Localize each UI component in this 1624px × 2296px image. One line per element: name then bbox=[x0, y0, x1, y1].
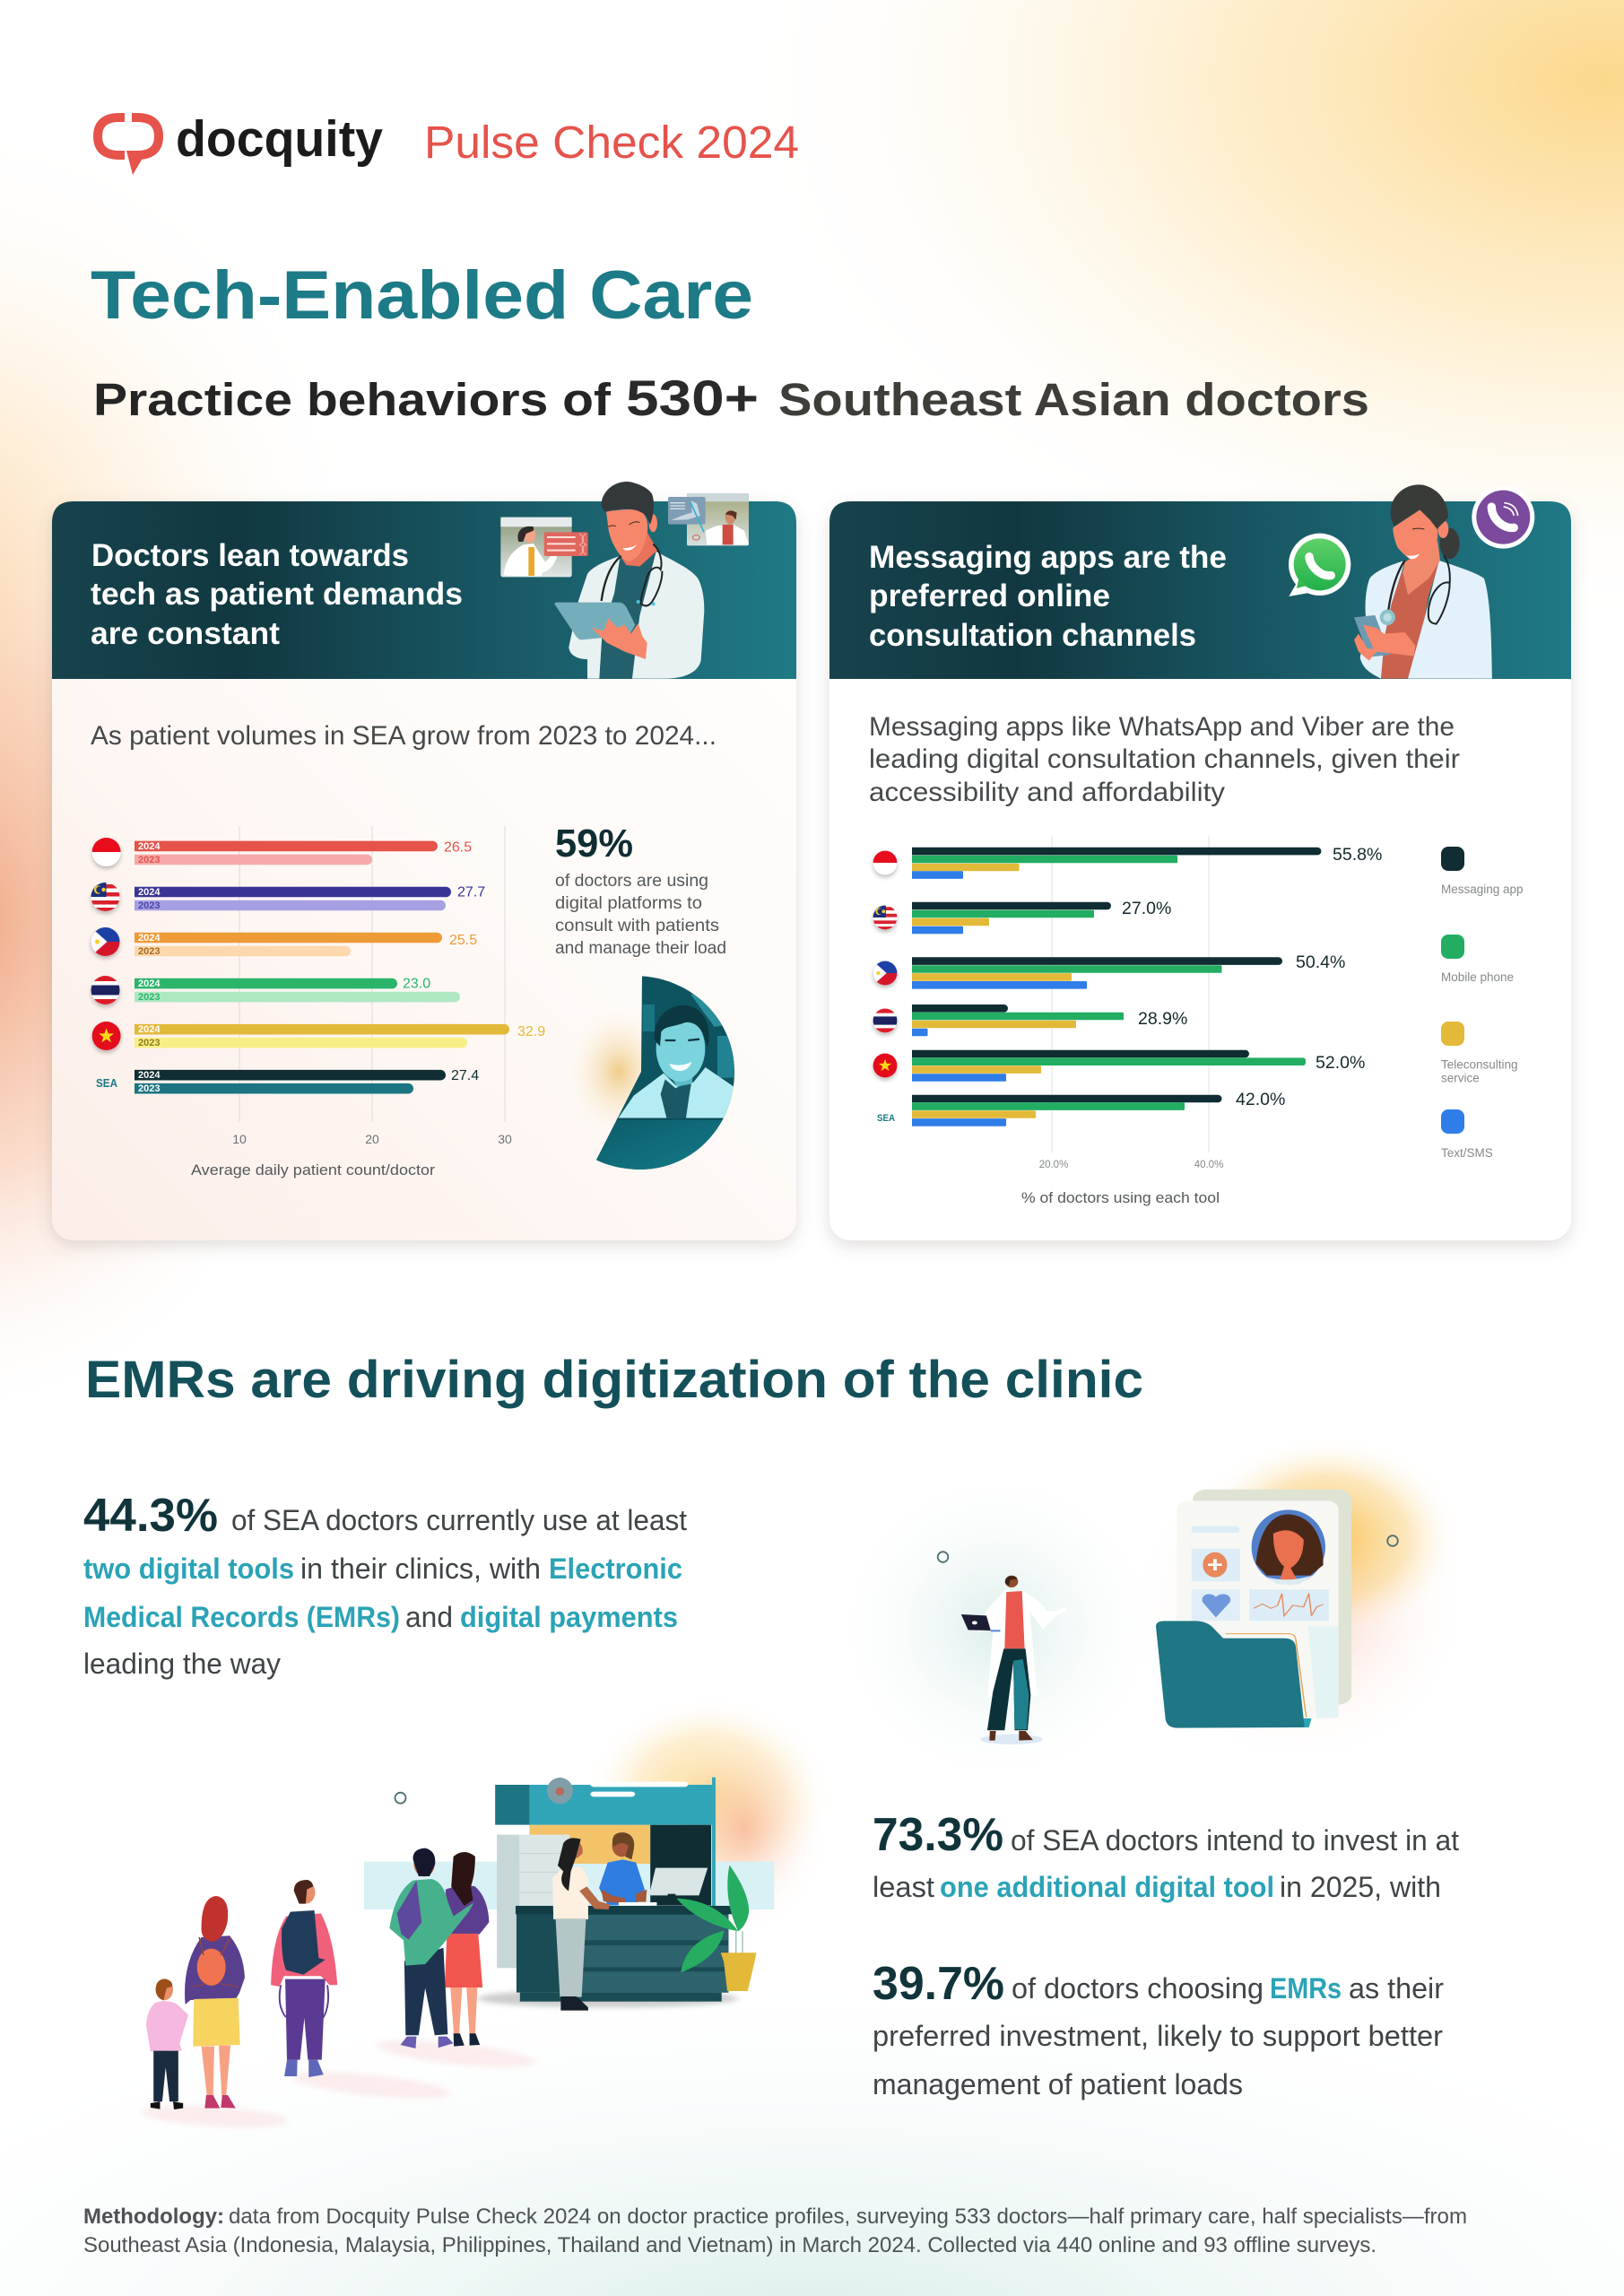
value labels: 52.0% bbox=[1316, 1053, 1365, 1073]
axis caption: % of doctors using each tool bbox=[1021, 1190, 1220, 1206]
value labels: 27.0% bbox=[1122, 899, 1171, 918]
bar chart: daily patient count: 2023 bbox=[138, 1038, 160, 1048]
icon: docquity speech bubble bbox=[98, 117, 159, 175]
year tags: 2024 bbox=[138, 933, 161, 944]
text block: 44.3 percent bbox=[83, 1490, 687, 1680]
stat: 59 percent: consult with patients bbox=[555, 917, 719, 935]
year tags: 2024 bbox=[138, 1024, 161, 1035]
card body bbox=[52, 501, 796, 1240]
decorative circle bbox=[395, 1793, 405, 1804]
figure: patient at counter bbox=[552, 1838, 610, 2011]
value labels: 42.0% bbox=[1236, 1090, 1285, 1109]
year tags: 2024 bbox=[138, 841, 161, 852]
legend: Mobile phone bbox=[1441, 970, 1514, 984]
header text bbox=[869, 540, 1227, 653]
country flags bbox=[873, 851, 897, 1077]
stat: 59 percent: of doctors are using bbox=[555, 872, 708, 891]
methodology note: Southeast Asia (Indonesia, Malaysia, Philippines, Thailand and Vietnam) in March 2024. Collected via 440 online and 93 offline surveys. bbox=[83, 2233, 1376, 2257]
text block: 44.3 percent: leading the way bbox=[83, 1648, 281, 1680]
text block: 39.7 percent: preferred investment, likely to support better bbox=[873, 2020, 1443, 2052]
axis ticks: 10 bbox=[232, 1132, 247, 1146]
axis ticks bbox=[1039, 1160, 1223, 1170]
gridlines bbox=[239, 826, 505, 1122]
text block: 44.3 percent: in their clinics, with bbox=[300, 1552, 541, 1585]
bars bbox=[126, 841, 509, 1094]
title: Tech-Enabled Care bbox=[91, 257, 753, 334]
heading: EMRs: EMRs are driving digitization of the clinic bbox=[85, 1351, 1143, 1409]
photo: smiling doctor in pac-man shape bbox=[579, 976, 734, 1170]
icon: whatsapp bbox=[1289, 534, 1350, 596]
intro paragraph: accessibility and affordability bbox=[869, 778, 1225, 807]
text block: 39.7 percent bbox=[873, 1958, 1444, 2100]
booth glow bbox=[583, 1695, 834, 1901]
year tags bbox=[138, 841, 161, 1094]
figure: receptionist bbox=[599, 1832, 708, 1906]
year tags: 2024 bbox=[138, 1070, 161, 1081]
illustration: doctor and patient record bbox=[827, 1435, 1471, 1794]
SEA label: SEA bbox=[96, 1076, 118, 1090]
value labels: 27.4 bbox=[451, 1068, 479, 1083]
gridlines bbox=[1052, 836, 1209, 1152]
country flags bbox=[91, 838, 121, 1050]
bar chart: daily patient count: 2023 bbox=[138, 900, 160, 911]
year tags: 2023 bbox=[138, 1083, 160, 1094]
illustration: female doctor with phone bbox=[1354, 484, 1492, 679]
intro paragraph: leading digital consultation channels, given their bbox=[869, 744, 1460, 774]
header text: consultation channels bbox=[869, 618, 1196, 653]
value labels: 25.5 bbox=[449, 933, 477, 948]
record sheets and folder bbox=[1156, 1490, 1351, 1728]
text block: 39.7 percent: management of patient loads bbox=[873, 2068, 1243, 2100]
value labels bbox=[1122, 845, 1382, 1109]
year tags: 2024 bbox=[138, 887, 161, 898]
wordmark: docquity bbox=[176, 110, 383, 168]
panel: messaging apps bbox=[829, 484, 1571, 1240]
subtitle: Practice behaviors of bbox=[93, 374, 612, 425]
stat: 59 percent bbox=[555, 822, 726, 958]
text block: 44.3 percent: and bbox=[405, 1601, 453, 1633]
panel: doctors lean towards tech bbox=[52, 482, 796, 1240]
text block: 44.3 percent: Medical Records (EMRs) bbox=[83, 1601, 400, 1633]
text block: 39.7 percent: 39.7% bbox=[873, 1958, 1004, 2010]
value labels: 27.7 bbox=[457, 884, 485, 900]
card header bbox=[829, 501, 1571, 679]
axis ticks: 30 bbox=[498, 1132, 512, 1146]
axis ticks bbox=[232, 1132, 512, 1146]
stat: 59 percent: and manage their load bbox=[555, 939, 726, 958]
header text: tech as patient demands bbox=[91, 577, 463, 612]
text block: 44.3 percent: Electronic bbox=[549, 1552, 682, 1585]
text block: 73.3 percent: 73.3% bbox=[873, 1809, 1003, 1861]
soft glows bbox=[827, 1435, 1471, 1794]
illustration: telehealth panels bbox=[500, 493, 749, 577]
legend: Text/SMS bbox=[1441, 1146, 1493, 1160]
intro sentence: As patient volumes in SEA grow from 2023 to 2024... bbox=[91, 721, 716, 751]
text block: 44.3 percent: digital payments bbox=[460, 1601, 678, 1633]
figure: potted plant bbox=[676, 1865, 756, 1991]
figure: woman with child bbox=[140, 1896, 290, 2131]
text block: 73.3 percent: of SEA doctors intend to invest in at bbox=[1011, 1824, 1459, 1857]
text block: 44.3 percent: two digital tools bbox=[83, 1552, 294, 1585]
value labels: 23.0 bbox=[403, 976, 430, 992]
methodology note: data from Docquity Pulse Check 2024 on doctor practice profiles, surveying 533 doctors—half primary care, half specialists—from bbox=[229, 2205, 1467, 2229]
figure: standing doctor with laptop bbox=[961, 1576, 1067, 1744]
text block: 73.3 percent bbox=[873, 1809, 1459, 1903]
reception booth bbox=[364, 1778, 774, 2007]
methodology note: Methodology: bbox=[83, 2205, 224, 2229]
decorative circles bbox=[938, 1535, 1398, 1562]
value labels: 50.4% bbox=[1296, 952, 1345, 972]
header text: Messaging apps are the bbox=[869, 540, 1227, 575]
bar chart: digital tool use bbox=[873, 836, 1524, 1206]
subtitle bbox=[93, 370, 1369, 426]
card body bbox=[829, 501, 1571, 1240]
value labels: 55.8% bbox=[1333, 845, 1382, 865]
intro paragraph: Messaging apps like WhatsApp and Viber are the bbox=[869, 712, 1455, 742]
bar chart: daily patient count: 2023 bbox=[138, 855, 160, 865]
subtitle: 530+ bbox=[626, 370, 759, 426]
illustration: male doctor with tablet bbox=[554, 482, 704, 679]
value labels: 32.9 bbox=[517, 1024, 545, 1039]
legend: Messaging app bbox=[1441, 883, 1524, 896]
header text bbox=[91, 538, 463, 651]
SEA label: SEA bbox=[877, 1113, 895, 1124]
header text: are constant bbox=[91, 616, 280, 651]
text block: 39.7 percent: of doctors choosing bbox=[1012, 1972, 1264, 2005]
header text: Doctors lean towards bbox=[91, 538, 409, 573]
illustration: patients queueing at reception bbox=[140, 1695, 834, 2131]
legend: service bbox=[1441, 1071, 1480, 1085]
methodology note bbox=[83, 2205, 1467, 2257]
legend bbox=[1441, 847, 1524, 1160]
text block: 39.7 percent: as their bbox=[1349, 1972, 1444, 2005]
value labels: 26.5 bbox=[444, 839, 472, 856]
bars bbox=[903, 848, 1321, 1126]
subtitle: Southeast Asian doctors bbox=[778, 374, 1369, 425]
year tags: 2024 bbox=[138, 978, 161, 989]
bar chart: daily patient count: 2023 bbox=[138, 992, 160, 1003]
header text: preferred online bbox=[869, 578, 1110, 613]
axis caption: Average daily patient count/doctor bbox=[191, 1162, 436, 1178]
stat: 59 percent: 59% bbox=[555, 822, 633, 865]
text block: 73.3 percent: one additional digital tool bbox=[940, 1871, 1274, 1903]
value labels: 28.9% bbox=[1138, 1009, 1187, 1029]
text block: 44.3 percent: 44.3% bbox=[83, 1490, 218, 1542]
bar chart: daily patient count bbox=[91, 826, 545, 1178]
value labels bbox=[403, 839, 545, 1083]
report name: Pulse Check 2024 bbox=[424, 117, 799, 168]
axis ticks: 20.0% bbox=[1039, 1160, 1068, 1170]
icon: viber bbox=[1472, 486, 1534, 549]
axis ticks: 20 bbox=[365, 1132, 379, 1146]
figures: couple in queue bbox=[374, 1848, 537, 2073]
intro paragraph bbox=[869, 712, 1460, 807]
logo bbox=[98, 110, 799, 175]
legend: Teleconsulting bbox=[1441, 1058, 1518, 1071]
stat: 59 percent: digital platforms to bbox=[555, 894, 702, 913]
text block: 44.3 percent: of SEA doctors currently use at least bbox=[231, 1504, 687, 1536]
bar chart: daily patient count: 2023 bbox=[138, 946, 160, 957]
text block: 39.7 percent: EMRs bbox=[1270, 1972, 1342, 2005]
text block: 73.3 percent: in 2025, with bbox=[1280, 1871, 1441, 1903]
figure: man with backpack bbox=[271, 1880, 453, 2104]
axis ticks: 40.0% bbox=[1194, 1160, 1223, 1170]
card header bbox=[52, 501, 796, 679]
text block: 73.3 percent: least bbox=[873, 1871, 934, 1903]
